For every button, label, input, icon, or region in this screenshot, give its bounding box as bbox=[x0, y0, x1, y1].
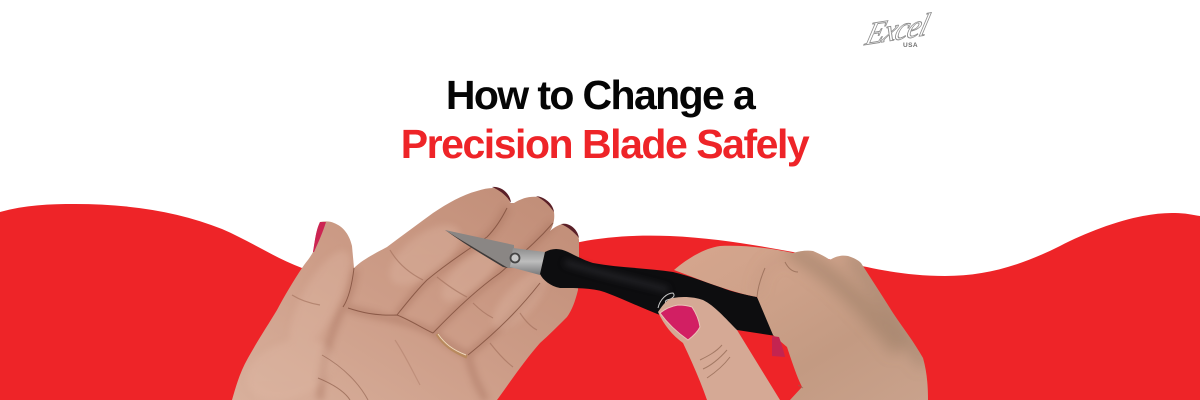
right hand bbox=[658, 246, 928, 400]
middle finger tip bbox=[772, 336, 785, 357]
palm and fingers bbox=[232, 188, 579, 400]
thumb nail bbox=[313, 222, 326, 252]
lighter finger pads bbox=[304, 226, 546, 382]
finger creases bbox=[318, 208, 553, 400]
blade edge bbox=[445, 230, 508, 268]
fingertip nail 2 bbox=[536, 196, 554, 212]
left hand bbox=[232, 187, 579, 400]
ring bbox=[437, 334, 467, 357]
precision knife bbox=[445, 230, 776, 336]
knuckle creases bbox=[700, 262, 803, 388]
joint creases bbox=[292, 250, 537, 385]
logo bbox=[861, 7, 934, 53]
fingertip nail 3 bbox=[561, 224, 579, 238]
black handle bbox=[540, 249, 776, 336]
logo usa: USA bbox=[903, 42, 918, 49]
thumb nail bbox=[660, 305, 700, 340]
handle logo bbox=[658, 293, 674, 308]
fingertip nail 1 bbox=[492, 187, 511, 203]
title bbox=[401, 72, 810, 167]
collet hole bbox=[510, 254, 520, 262]
handle highlight bbox=[565, 262, 668, 290]
ferrule bbox=[510, 248, 545, 275]
blade bbox=[445, 230, 514, 268]
ring highlight bbox=[438, 334, 466, 355]
hand shading bbox=[784, 250, 924, 366]
title line 2: Precision Blade Safely bbox=[401, 121, 810, 167]
hand back and index finger bbox=[674, 246, 928, 400]
red wave bbox=[0, 204, 1200, 400]
title line 1: How to Change a bbox=[446, 72, 757, 118]
logo script: Excel bbox=[861, 7, 934, 53]
soft hand shading bbox=[304, 209, 553, 400]
thumb bbox=[658, 297, 780, 400]
